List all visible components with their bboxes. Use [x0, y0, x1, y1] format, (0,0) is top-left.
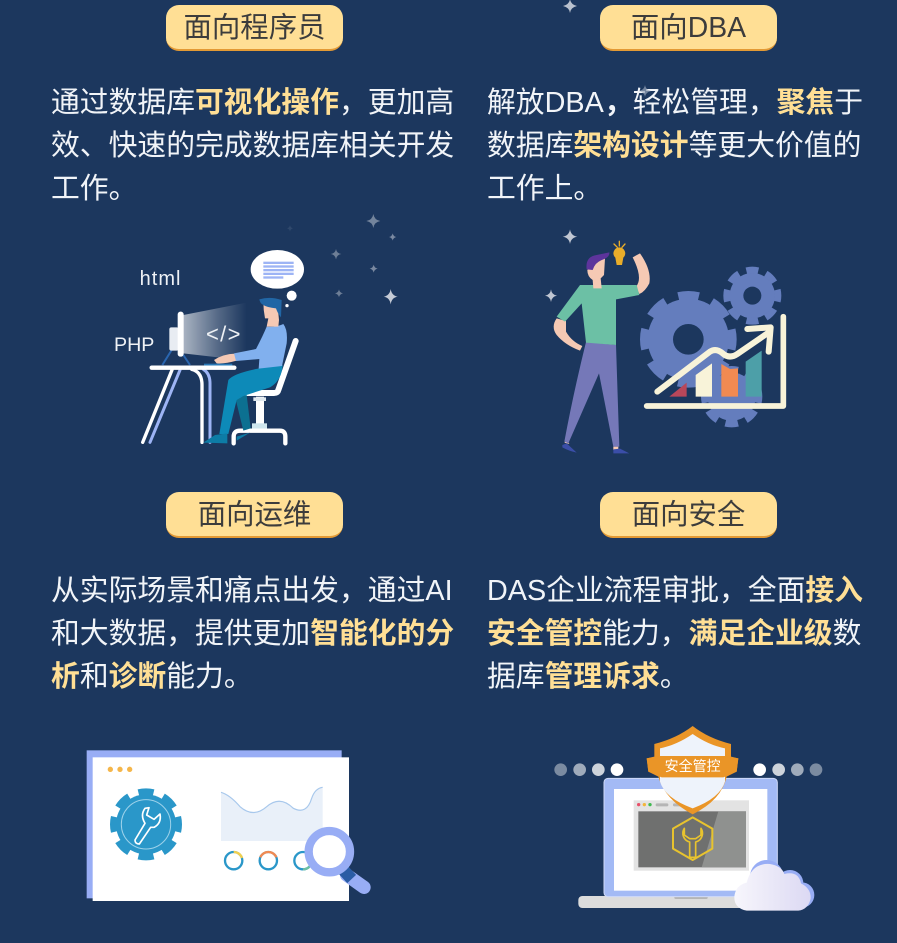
text block: DBA description: 解放DBA，轻松管理，聚焦于 — [487, 87, 863, 119]
text block: operations description: 从实际场景和痛点出发，通过AI — [51, 575, 453, 607]
icon: top star — [563, 0, 577, 13]
heading: 面向DBA — [600, 5, 777, 51]
text block: security description — [487, 575, 863, 693]
panel: programmers — [51, 5, 454, 446]
text block: security description: DAS企业流程审批，全面接入 — [487, 575, 863, 607]
heading: 面向安全: 面向安全 — [632, 498, 745, 530]
icon: person with idea and growth chart illustration — [545, 230, 786, 454]
icon: programmer at desk illustration — [114, 214, 398, 446]
icon: programmer at desk illustration: html — [140, 268, 181, 290]
heading: 面向安全 — [600, 492, 777, 538]
icon: programmer at desk illustration: PHP — [114, 334, 154, 356]
heading: 面向程序员 — [166, 5, 343, 51]
text block: security description: 据库管理诉求。 — [487, 661, 689, 693]
text block: DBA description: 工作上。 — [487, 173, 602, 205]
panel: DBA — [487, 0, 863, 454]
heading: 面向运维 — [166, 492, 343, 538]
heading: 面向程序员: 面向程序员 — [184, 12, 325, 44]
text block: DBA description — [487, 87, 863, 205]
text block: programmers description — [51, 87, 454, 205]
icon: laptop with security shield and cloud illustration: 安全管控 — [665, 758, 721, 774]
text block: operations description: 析和诊断能力。 — [51, 661, 253, 693]
text block: programmers description: 通过数据库可视化操作，更加高 — [51, 87, 454, 119]
icon: laptop with security shield and cloud illustration — [554, 726, 822, 911]
text block: DBA description: 数据库架构设计等更大价值的 — [487, 130, 861, 162]
icon: programmer at desk illustration: </> — [206, 321, 242, 346]
heading: 面向DBA: 面向DBA — [631, 12, 746, 44]
text block: programmers description: 工作。 — [51, 173, 137, 205]
panel: security — [487, 492, 863, 911]
text block: operations description — [51, 575, 454, 693]
text block: programmers description: 效、快速的完成数据库相关开发 — [51, 130, 454, 162]
text block: operations description: 和大数据，提供更加智能化的分 — [51, 618, 454, 650]
icon: faint star behind text — [639, 85, 651, 97]
icon: dashboard with gear and magnifier illustration — [86, 750, 371, 901]
heading: 面向运维: 面向运维 — [198, 498, 311, 530]
text block: security description: 安全管控能力，满足企业级数 — [487, 618, 861, 650]
panel: operations — [51, 492, 454, 901]
